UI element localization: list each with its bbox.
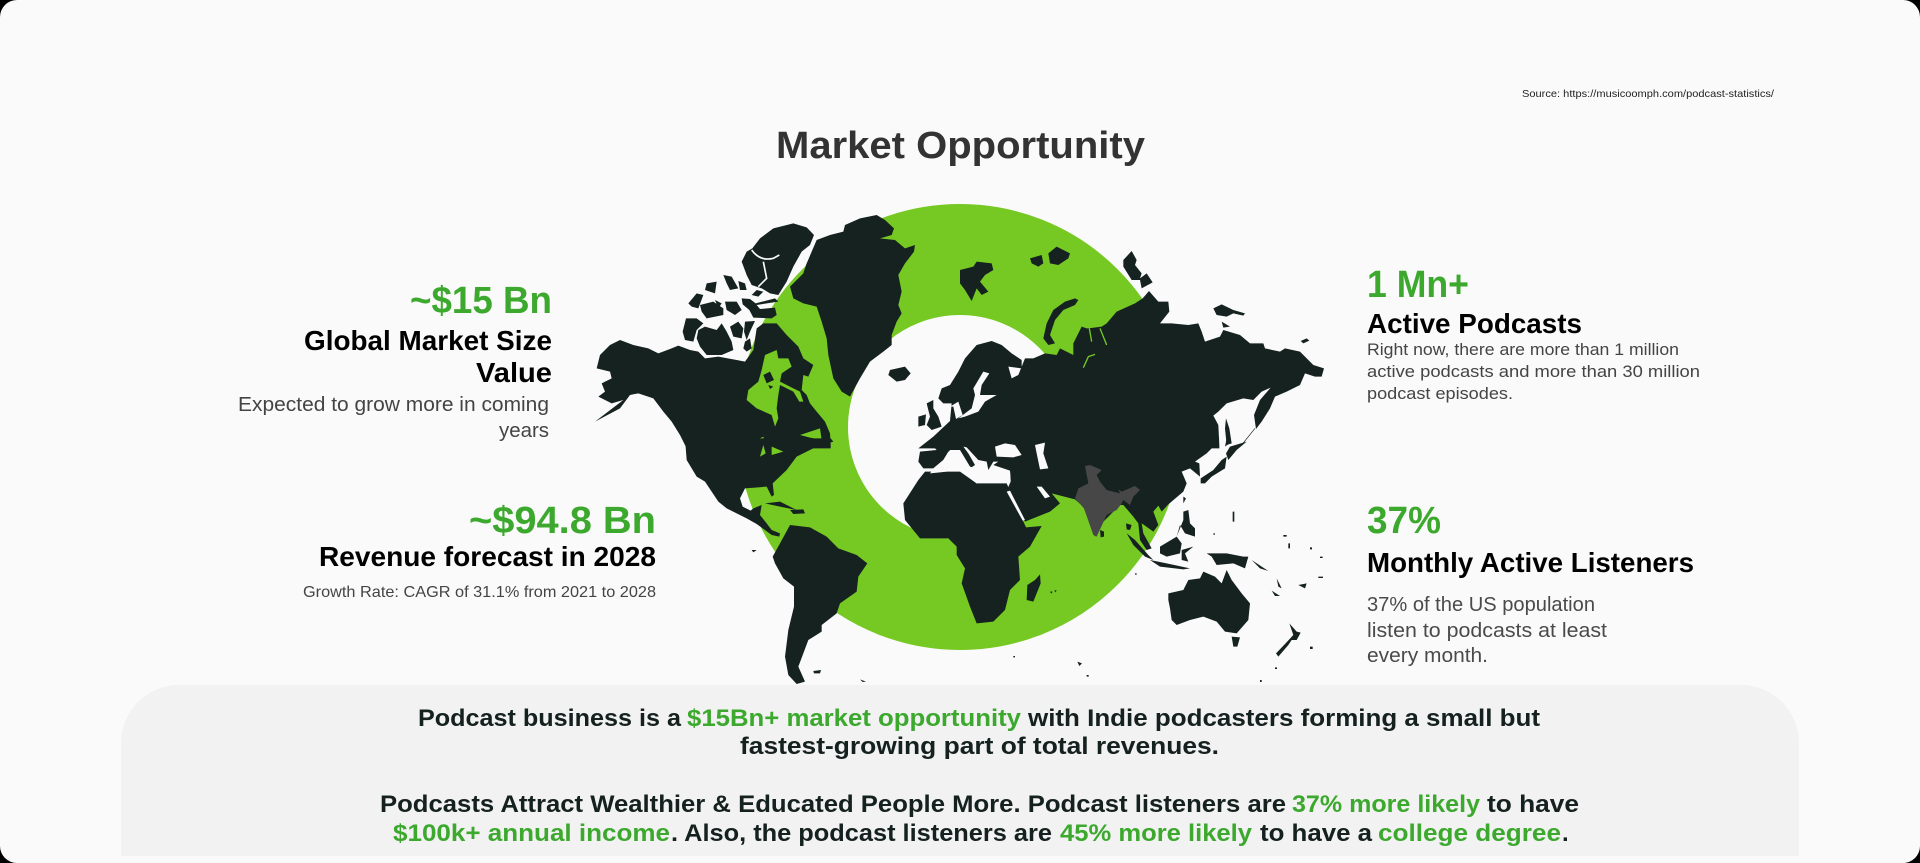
stat: revenue forecast (303, 500, 656, 601)
Great Lakes (760, 445, 783, 457)
stat: monthly active listeners (1367, 500, 1694, 667)
heading (304, 325, 552, 388)
map: south-east section (903, 438, 1323, 682)
summary: listener demographics (380, 791, 1579, 847)
Kuril Islands (1242, 428, 1255, 445)
value: 37% (1367, 500, 1441, 542)
South America (773, 525, 867, 684)
value: 1 Mn+ (1367, 264, 1469, 306)
heading: Monthly Active Listeners (1367, 547, 1694, 578)
Eurasia, northern part (918, 291, 1324, 448)
Hudson Bay (747, 350, 822, 443)
description (238, 394, 549, 442)
summary: listener demographics: 37% more likely (1292, 791, 1481, 818)
heading: Global Market Size (304, 325, 552, 356)
Hudson Bay islands (763, 372, 774, 389)
summary: market opportunity: $15Bn+ market opportunity (687, 705, 1022, 732)
description: active podcasts and more than 30 million (1367, 362, 1700, 381)
Mediterranean Sea (930, 447, 1011, 483)
India highlight (1075, 465, 1140, 537)
description: every month. (1367, 645, 1488, 667)
stat: global market size (238, 280, 552, 442)
Gulf of California (705, 483, 716, 501)
ocean island specks (1013, 512, 1323, 682)
summary: market opportunity: Podcast business is a (418, 705, 682, 732)
Tasmania (1232, 637, 1240, 647)
Greenland (790, 215, 915, 397)
Svalbard (960, 262, 993, 301)
Siberian river gulfs (1083, 328, 1107, 368)
summary: listener demographics: $100k+ annual income (393, 820, 670, 847)
summary: listener demographics: college degree (1378, 820, 1561, 847)
Severnaya Zemlya (1123, 251, 1153, 288)
map: south-west section (685, 438, 867, 684)
panel background (121, 685, 1799, 856)
New Siberian Islands and Wrangel (1213, 304, 1309, 343)
summary: market opportunity: fastest-growing part of total revenues. (740, 733, 1219, 760)
North America, northern part (595, 323, 831, 448)
Sumatra (1127, 533, 1153, 560)
Australia (1168, 570, 1250, 633)
description (1367, 594, 1607, 667)
Baltic Sea and White Sea details (950, 372, 997, 419)
Pacific island groups (1050, 523, 1307, 666)
Java (1150, 560, 1190, 569)
Taiwan and Philippines (1177, 497, 1195, 537)
Sulawesi (1182, 547, 1193, 562)
summary: listener demographics: 45% more likely (1060, 820, 1253, 847)
Black Sea, Caspian Sea, Persian Gulf, Red Sea (995, 443, 1050, 521)
Ireland (918, 414, 926, 427)
summary: listener demographics: Podcasts Attract Wealthier & Educated People More. Podcast listeners are (380, 791, 1286, 818)
description (1367, 340, 1700, 403)
Madagascar (1027, 574, 1041, 602)
description: Expected to grow more in coming (238, 394, 549, 416)
New Zealand (1276, 623, 1301, 657)
Caribbean islands (765, 502, 805, 514)
Africa (903, 472, 1042, 623)
value: ~$15 Bn (410, 280, 552, 322)
summary: listener demographics: . Also, the podcast listeners are (671, 820, 1052, 847)
summary: listener demographics: to have a (1260, 820, 1373, 847)
North America, southern part (685, 438, 833, 537)
Arctic archipelago (683, 275, 778, 355)
summary: market opportunity (418, 705, 1540, 760)
summary: listener demographics: . (1562, 820, 1569, 847)
title: Market Opportunity (776, 125, 1145, 167)
world map (595, 215, 1324, 684)
Japan (1201, 438, 1247, 483)
summary panel (121, 685, 1799, 856)
Sakhalin (1225, 418, 1232, 445)
summary: market opportunity: with Indie podcasters forming a small but (1027, 705, 1540, 732)
Southern Eurasia (918, 438, 1219, 550)
Novaya Zemlya (1043, 298, 1078, 345)
description: Right now, there are more than 1 million (1367, 340, 1679, 359)
source note: Source: https://musicoomph.com/podcast-statistics/ (1522, 88, 1774, 100)
description: years (499, 420, 549, 442)
green ring (792, 260, 1128, 594)
New Guinea (1207, 553, 1248, 568)
Franz Josef Land (1030, 247, 1070, 267)
Borneo (1160, 537, 1182, 557)
Sri Lanka (1100, 530, 1104, 537)
summary: listener demographics: to have (1487, 791, 1579, 818)
description: listen to podcasts at least (1367, 620, 1607, 642)
description: Growth Rate: CAGR of 31.1% from 2021 to 2028 (303, 584, 656, 601)
Ellesmere Island (742, 223, 814, 295)
map: north-east section (918, 247, 1324, 448)
Iceland (888, 367, 911, 382)
description: 37% of the US population (1367, 594, 1595, 616)
Arctic channels (752, 250, 779, 287)
heading: Revenue forecast in 2028 (319, 541, 656, 572)
description: podcast episodes. (1367, 384, 1513, 403)
value: ~$94.8 Bn (469, 500, 656, 542)
map: north-west section (595, 215, 942, 448)
Great Britain (927, 400, 942, 430)
stat: active podcasts (1367, 264, 1700, 403)
Falkland and Galapagos Islands (752, 550, 866, 682)
heading: Active Podcasts (1367, 308, 1582, 339)
heading: Value (476, 357, 552, 388)
